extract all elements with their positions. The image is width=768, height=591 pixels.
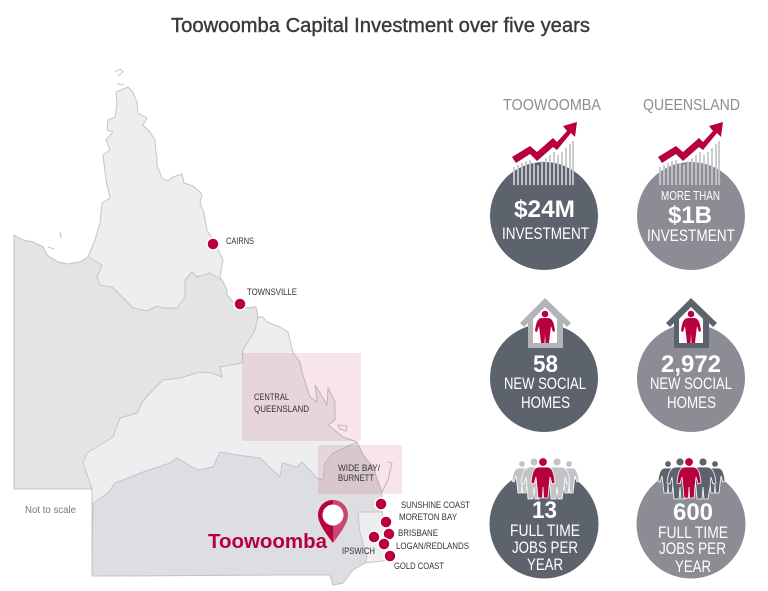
figure: $24M (514, 196, 575, 223)
icon: house with person (520, 298, 571, 348)
stat: Toowoomba social homes (490, 298, 598, 432)
label: INVESTMENT (502, 224, 589, 243)
figure: $1B (668, 202, 712, 229)
stat: Queensland social homes (637, 298, 745, 432)
figure: 58 (533, 351, 558, 378)
figure: 2,972 (661, 351, 721, 378)
map labels: CAIRNS (226, 236, 254, 246)
region: north and central Queensland (14, 87, 390, 585)
map labels: IPSWICH (342, 546, 375, 556)
circle (490, 324, 598, 432)
column heading: Toowoomba: TOOWOOMBA (503, 97, 601, 114)
stat: Queensland investment (637, 122, 745, 270)
figure: 13 (532, 497, 557, 524)
icon: rising chart arrow (512, 122, 577, 185)
label: FULL TIME (510, 521, 580, 540)
map labels: SUNSHINE COAST (401, 500, 470, 510)
stat: Toowoomba jobs: YEAR (527, 555, 563, 574)
stat: Queensland social homes: HOMES (667, 393, 716, 412)
circle (490, 162, 598, 270)
icon: group of people (512, 458, 579, 499)
icon: location pin (318, 500, 348, 543)
map of Queensland (14, 69, 470, 585)
highlight: Wide Bay/Burnett (318, 445, 402, 494)
figure: 600 (673, 499, 713, 526)
stat: Queensland jobs (636, 458, 746, 578)
stat: Queensland jobs: YEAR (675, 557, 711, 576)
map labels: BRISBANE (398, 528, 438, 538)
circle (636, 470, 746, 578)
circle (637, 324, 745, 432)
islands (48, 69, 392, 492)
map labels: CENTRAL (254, 392, 289, 402)
map labels: WIDE BAY/ (338, 463, 380, 473)
region: southern Queensland (92, 442, 382, 585)
stat: Toowoomba jobs (490, 458, 598, 578)
map labels: QUEENSLAND (254, 404, 309, 414)
title: Toowoomba Capital Investment over five years (171, 15, 590, 37)
column heading: Queensland: QUEENSLAND (643, 97, 740, 114)
city dots (207, 238, 396, 562)
icon: group of people (658, 458, 725, 499)
label: Toowoomba: Toowoomba (208, 531, 328, 553)
highlight: Central Queensland (242, 353, 361, 441)
circle (637, 162, 745, 270)
qualifier: MORE THAN (661, 189, 720, 203)
icon: house with person (666, 298, 717, 348)
map labels: LOGAN/REDLANDS (396, 541, 469, 551)
map labels: TOWNSVILLE (247, 287, 297, 297)
label: INVESTMENT (647, 226, 735, 245)
map labels: BURNETT (338, 473, 374, 483)
stat: Toowoomba jobs: JOBS PER (512, 538, 578, 557)
map labels (226, 236, 470, 571)
note: not to scale: Not to scale (25, 505, 76, 516)
stat: Toowoomba social homes: HOMES (521, 393, 570, 412)
region: outback (14, 235, 258, 489)
map labels: GOLD COAST (394, 561, 444, 571)
label: FULL TIME (658, 523, 728, 542)
label: NEW SOCIAL (504, 374, 586, 393)
icon: rising chart arrow (658, 122, 723, 185)
circle (490, 470, 598, 578)
label: NEW SOCIAL (650, 374, 732, 393)
stat: Toowoomba investment (490, 122, 598, 270)
map labels: MORETON BAY (399, 512, 457, 522)
stat: Queensland jobs: JOBS PER (659, 539, 726, 558)
